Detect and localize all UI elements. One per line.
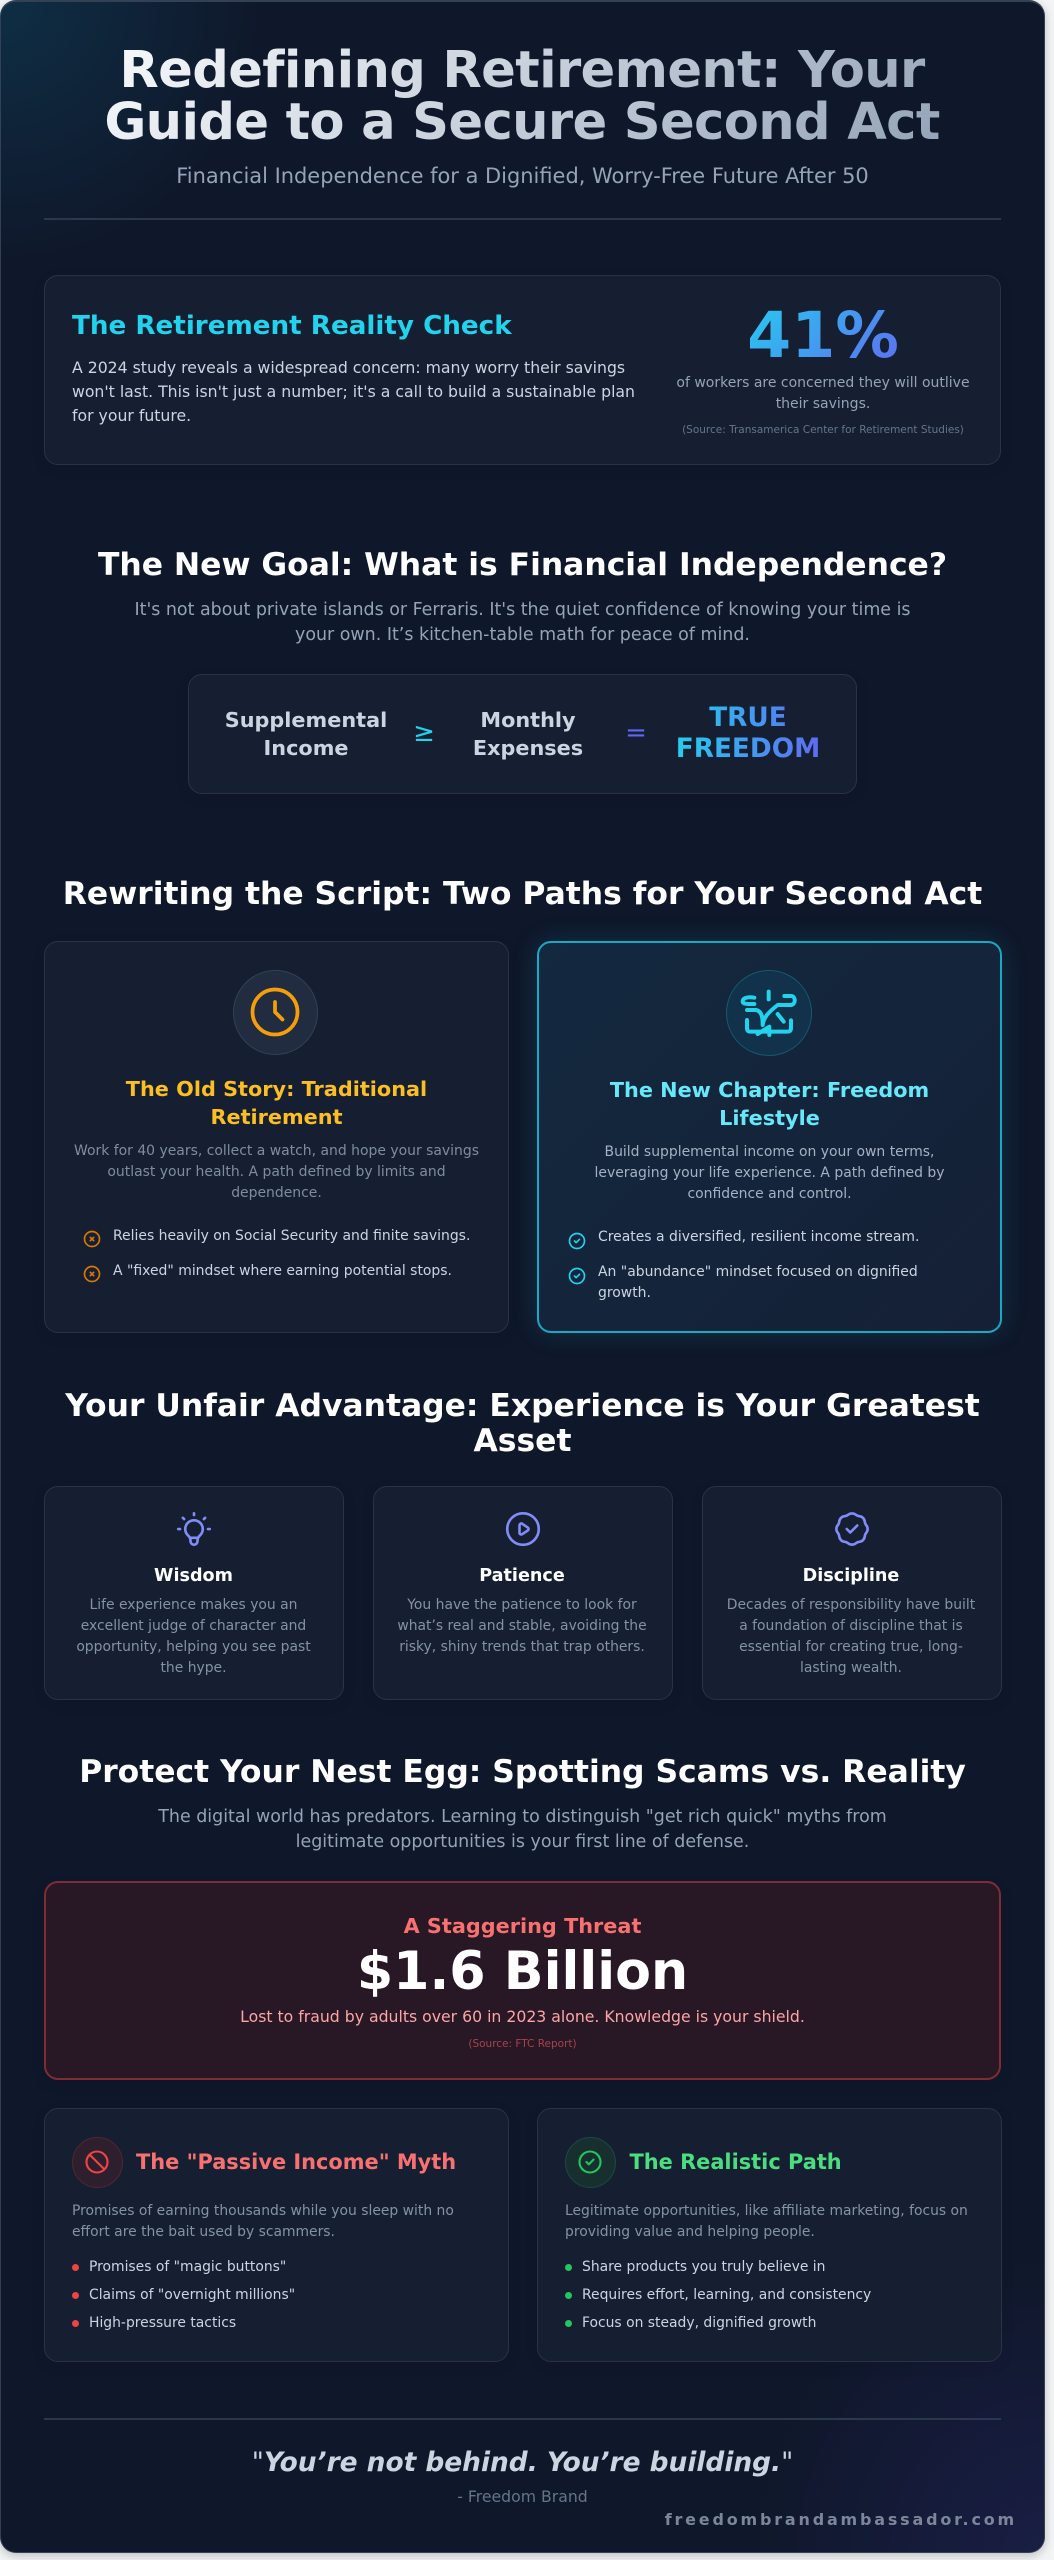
discipline text: lasting wealth. [800, 1660, 902, 1676]
reality check body text: A 2024 study reveals a widespread concern: many worry their savings [72, 358, 625, 377]
panel: discipline [702, 1486, 1002, 1700]
formula result: true freedom: TRUE [709, 702, 787, 732]
list text: Creates a diversified, resilient income stream. [598, 1229, 919, 1245]
list item: social security [84, 1228, 470, 1248]
wisdom text [76, 1597, 311, 1676]
panel: passive income myth [44, 2108, 509, 2362]
myth description: Promises of earning thousands while you sleep with no [72, 2203, 454, 2219]
formula term: monthly expenses: Expenses [473, 736, 583, 760]
new chapter heading [610, 1078, 929, 1130]
subtitle: Financial Independence for a Dignified, Worry-Free Future After 50 [176, 164, 869, 188]
statistic caption [676, 375, 970, 412]
reality check body text: for your future. [72, 406, 191, 425]
statistic caption: their savings. [776, 396, 870, 412]
threat label: A Staggering Threat [404, 1914, 641, 1938]
formula term: supplemental income: Income [264, 736, 348, 760]
title [97, 44, 947, 148]
bullet [565, 2292, 572, 2299]
patience text: what’s real and stable, avoiding the [397, 1618, 647, 1634]
list text: Share products you truly believe in [582, 2259, 825, 2275]
heading: two paths: Rewriting the Script: Two Paths for Your Second Act [63, 876, 982, 912]
formula operator: equals: = [625, 718, 647, 748]
realistic list [565, 2259, 871, 2331]
myth description [72, 2203, 454, 2240]
website watermark: freedombrandambassador.com [665, 2510, 1017, 2529]
heading: the new goal: The New Goal: What is Financial Independence? [98, 547, 947, 583]
heading: unfair advantage [65, 1388, 980, 1458]
panel: the new chapter [537, 941, 1002, 1332]
list text: Focus on steady, dignified growth [582, 2315, 816, 2331]
new chapter description: leveraging your life experience. A path defined by [595, 1165, 944, 1181]
threat figure: $1.6 Billion [357, 1942, 688, 2002]
icon: x circle [84, 1230, 100, 1248]
old story description: Work for 40 years, collect a watch, and hope your savings [74, 1143, 479, 1159]
icon: clock [233, 970, 318, 1055]
formula term: monthly expenses: Monthly [480, 708, 576, 732]
icon: check circle [568, 1232, 586, 1250]
realistic description: Legitimate opportunities, like affiliate marketing, focus on [565, 2203, 968, 2219]
statistic source: (Source: Transamerica Center for Retirement Studies) [682, 424, 964, 436]
icon: freedom symbol [726, 970, 812, 1056]
reality check heading: The Retirement Reality Check [72, 311, 512, 341]
list text: Claims of "overnight millions" [89, 2287, 295, 2303]
panel: retirement reality check [44, 275, 1001, 464]
discipline text: essential for creating true, long- [739, 1639, 963, 1655]
panel: the old story [44, 941, 509, 1332]
statistic 41%: 41% [747, 298, 899, 372]
new goal intro text: your own. It’s kitchen-table math for peace of mind. [295, 624, 750, 644]
wisdom text: excellent judge of character and [81, 1618, 306, 1634]
panel: staggering threat [44, 1881, 1001, 2080]
formula term: supplemental income: Supplemental [225, 708, 387, 732]
bullet [565, 2264, 572, 2271]
icon: badge check [835, 1512, 869, 1546]
closing quote: "You’re not behind. You’re building." [252, 2447, 793, 2478]
list item: abundance mindset [568, 1264, 918, 1301]
discipline heading: Discipline [803, 1566, 899, 1586]
new goal intro text [134, 600, 911, 644]
new chapter heading: The New Chapter: Freedom [610, 1078, 929, 1102]
patience heading: Patience [479, 1566, 565, 1586]
realistic description [565, 2203, 968, 2240]
patience text [397, 1597, 647, 1655]
myth list [72, 2259, 295, 2331]
list text: An "abundance" mindset focused on dignified [598, 1264, 918, 1280]
new chapter description [595, 1144, 944, 1202]
list text: A "fixed" mindset where earning potential stops. [113, 1263, 452, 1279]
statistic caption: of workers are concerned they will outlive [676, 375, 970, 391]
discipline text: Decades of responsibility have built [727, 1597, 975, 1613]
icon: check [565, 2137, 616, 2188]
panel: patience [372, 1486, 672, 1700]
old story heading: The Old Story: Traditional [126, 1077, 427, 1101]
bullet [72, 2292, 79, 2299]
threat description: Lost to fraud by adults over 60 in 2023 alone. Knowledge is your shield. [240, 2007, 805, 2026]
bullet [72, 2320, 79, 2327]
list item: fixed mindset [84, 1263, 452, 1282]
old story heading [126, 1077, 427, 1129]
bullet [565, 2320, 572, 2327]
list text: Relies heavily on Social Security and finite savings. [113, 1228, 470, 1244]
list text: growth. [598, 1285, 651, 1301]
reality check body text: won't last. This isn't just a number; it's a call to build a sustainable plan [72, 382, 635, 401]
list text: High-pressure tactics [89, 2315, 236, 2331]
new chapter description: confidence and control. [687, 1186, 852, 1202]
bullet [72, 2264, 79, 2271]
protect intro text: The digital world has predators. Learning to distinguish "get rich quick" myths from [158, 1807, 887, 1827]
title: Guide to a Secure Second Act [104, 92, 940, 152]
realistic description: providing value and helping people. [565, 2224, 815, 2240]
list text [598, 1264, 918, 1301]
old story description: dependence. [231, 1185, 322, 1201]
old story description [74, 1143, 479, 1201]
list text: Requires effort, learning, and consistency [582, 2287, 871, 2303]
discipline text: a foundation of discipline that is [739, 1618, 963, 1634]
quote attribution: - Freedom Brand [457, 2487, 588, 2506]
protect intro text [158, 1807, 887, 1852]
formula result: true freedom [668, 702, 828, 766]
reality check body text [72, 358, 635, 425]
protect intro text: legitimate opportunities is your first line of defense. [296, 1832, 749, 1852]
new goal intro text: It's not about private islands or Ferraris. It's the quiet confidence of knowing your time is [134, 600, 911, 620]
list item: income stream [568, 1229, 919, 1250]
discipline text [727, 1597, 975, 1676]
formula term: monthly expenses [473, 708, 583, 760]
list text: Promises of "magic buttons" [89, 2259, 286, 2275]
title: Redefining Retirement: Your [119, 40, 925, 100]
icon: x circle [84, 1266, 100, 1282]
panel: freedom formula [188, 674, 857, 794]
myth heading: The "Passive Income" Myth [136, 2150, 456, 2174]
heading: unfair advantage: Asset [474, 1422, 571, 1458]
wisdom text: opportunity, helping you see past [76, 1639, 311, 1655]
new chapter heading: Lifestyle [719, 1106, 820, 1130]
old story heading: Retirement [210, 1105, 343, 1129]
patience text: You have the patience to look for [407, 1597, 637, 1613]
threat source: (Source: FTC Report) [468, 2038, 577, 2050]
formula result: true freedom: FREEDOM [676, 734, 820, 764]
panel: wisdom [44, 1486, 344, 1700]
formula term: supplemental income [225, 708, 387, 760]
new chapter description: Build supplemental income on your own terms, [605, 1144, 934, 1160]
old story description: outlast your health. A path defined by limits and [107, 1164, 446, 1180]
patience text: risky, shiny trends that trap others. [399, 1639, 645, 1655]
realistic heading: The Realistic Path [630, 2150, 842, 2174]
formula operator: greater or equal: ≥ [413, 718, 435, 748]
icon: ban [72, 2137, 123, 2188]
heading: unfair advantage: Your Unfair Advantage: Experience is Your Greatest [65, 1388, 980, 1424]
icon: lightbulb [176, 1512, 212, 1546]
wisdom text: the hype. [160, 1660, 226, 1676]
heading: protect your nest egg: Protect Your Nest Egg: Spotting Scams vs. Reality [79, 1754, 966, 1790]
wisdom heading: Wisdom [154, 1566, 233, 1586]
wisdom text: Life experience makes you an [90, 1597, 297, 1613]
panel: realistic path [537, 2108, 1002, 2362]
myth description: effort are the bait used by scammers. [72, 2224, 335, 2240]
icon: check circle [568, 1268, 586, 1284]
icon: play circle [506, 1512, 540, 1546]
